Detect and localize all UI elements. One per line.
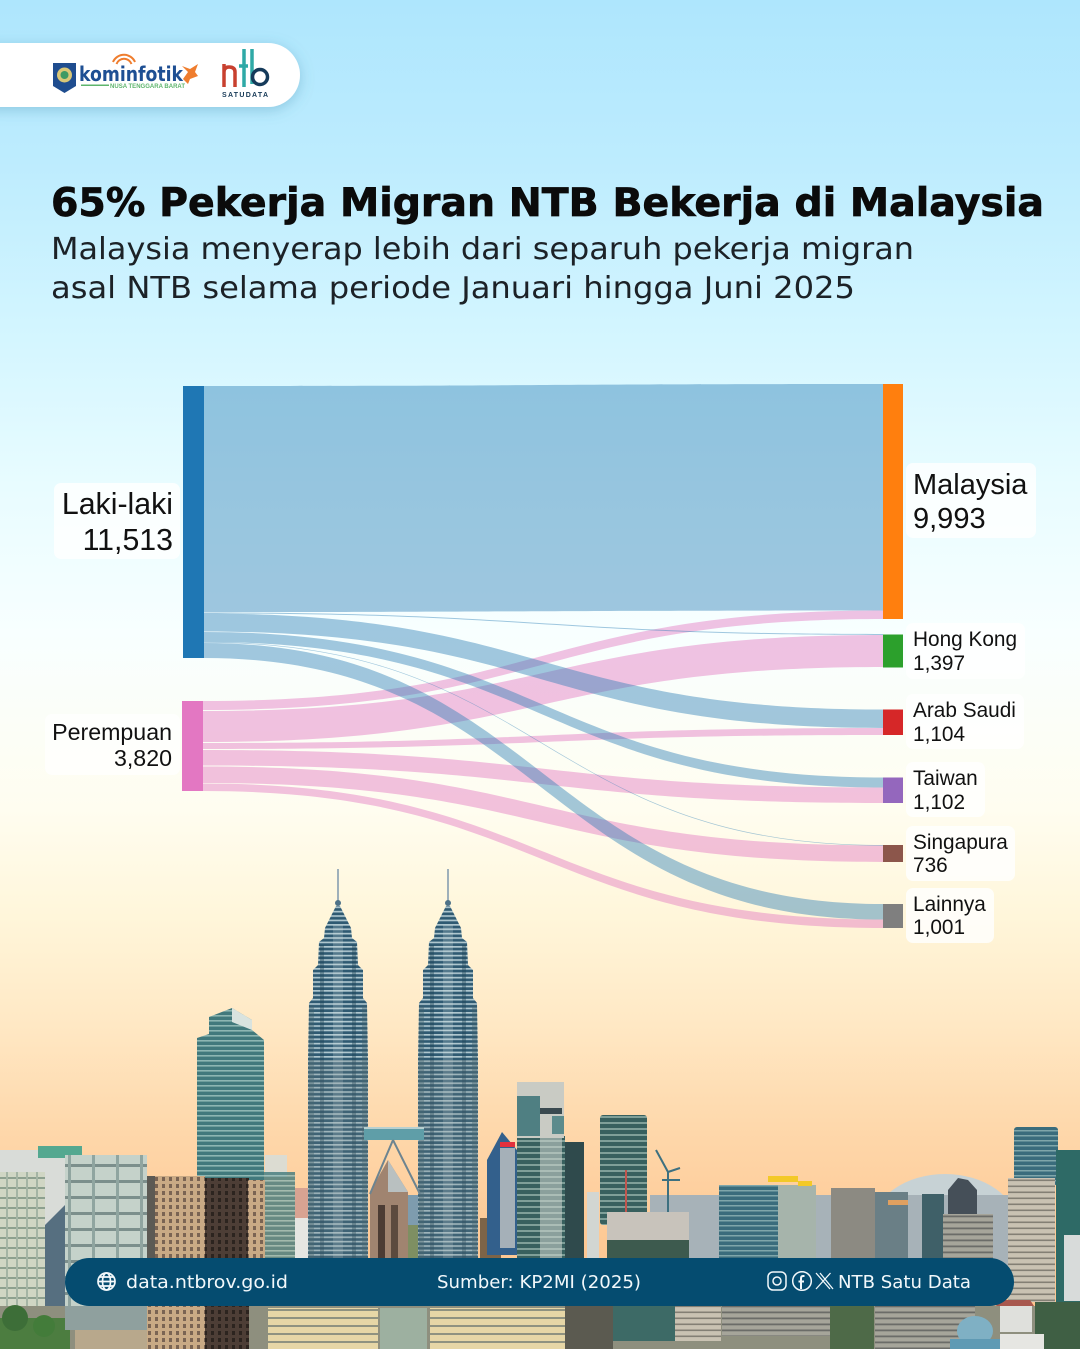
dark hotel tower: [205, 1178, 249, 1349]
links: Perempuan flows: [203, 610, 883, 928]
blue distant building: [406, 1195, 421, 1235]
dark blue tower with red top: [487, 1132, 517, 1255]
label: Perempuan: [45, 714, 180, 775]
label: Laki-laki: 11,513: [83, 524, 173, 557]
tower crown highlight: [232, 1008, 252, 1030]
teal roof: [38, 1146, 82, 1158]
Nusa Tenggara Barat tagline: NUSA TENGGARA BARAT: [110, 84, 185, 90]
orange rooftop: [888, 1200, 908, 1205]
construction building: [607, 1170, 689, 1264]
teal office tower: [197, 1008, 264, 1200]
distant buildings haze: [650, 1195, 1050, 1270]
label: Taiwan: 1,102: [913, 791, 965, 814]
icon: wifi arcs: [113, 55, 135, 64]
skybridge: [364, 1127, 424, 1194]
label: Malaysia: [906, 463, 1036, 538]
label: Arab Saudi: 1,104: [913, 723, 965, 746]
dark glass side: [45, 1205, 65, 1325]
links: Laki-laki flows: [204, 384, 883, 920]
label: Laki-laki: Laki-laki: [62, 488, 173, 521]
social handle: NTB Satu Data: [838, 1272, 971, 1293]
grey blue block: [875, 1192, 908, 1262]
green rule: [81, 84, 109, 86]
label: Singapura: 736: [913, 854, 948, 877]
label: Lainnya: 1,001: [913, 916, 965, 939]
kominfotik wordmark: kominfotik: [79, 62, 184, 86]
ntb logo: [224, 49, 268, 87]
label: Perempuan: 3,820: [114, 745, 172, 771]
Petronas tower left: [308, 869, 368, 1262]
node: Laki-laki: [183, 386, 204, 658]
lower city: [0, 1300, 1080, 1349]
title: 65% Pekerja Migran NTB Bekerja di Malaysia: [51, 181, 1044, 226]
label: Hong Kong: Hong Kong: [913, 628, 1017, 651]
crane: [656, 1150, 680, 1212]
label: Lainnya: Lainnya: [913, 893, 986, 916]
yellow roofs: [768, 1176, 798, 1182]
footer bar: [65, 1258, 1014, 1306]
brown hotel tower: [147, 1176, 205, 1349]
icon: facebook: [793, 1272, 811, 1290]
subtitle: asal NTB selama periode Januari hingga Juni 2025: [51, 271, 855, 306]
website: data.ntbrov.go.id: [126, 1272, 288, 1293]
node: Arab Saudi: [883, 710, 903, 735]
label: Hong Kong: [906, 623, 1025, 679]
pink distant building: [295, 1188, 311, 1228]
label: Lainnya: [906, 888, 994, 943]
mid rise glass block: [719, 1185, 779, 1262]
label: Taiwan: [906, 762, 985, 817]
label: Arab Saudi: [906, 694, 1024, 749]
node: Hong Kong: [883, 634, 903, 668]
Petronas tower right: [418, 869, 478, 1262]
node: Lainnya: [883, 904, 903, 928]
icon: instagram: [768, 1272, 786, 1290]
node: Malaysia: [883, 384, 903, 619]
label: Malaysia: 9,993: [913, 503, 986, 535]
source: Sumber: KP2MI (2025): [437, 1272, 641, 1293]
subtitle: Malaysia menyerap lebih dari separuh pekerja migran: [51, 232, 914, 267]
slim white tower: [587, 1192, 599, 1262]
green distant trees: [408, 1225, 421, 1262]
cream tower left edge: [0, 1172, 45, 1318]
purple grey block: [943, 1214, 993, 1262]
white tower right: [1064, 1235, 1080, 1301]
label: Hong Kong: 1,397: [913, 652, 965, 675]
label: Malaysia: Malaysia: [913, 469, 1028, 501]
node: Taiwan: [883, 778, 903, 803]
white low block beside tower: [295, 1218, 310, 1268]
skyline illustration: [0, 869, 1080, 1349]
small pyramid tower: [370, 1160, 408, 1262]
dark green glass tower: [1056, 1150, 1080, 1302]
tan end of hotel: [248, 1180, 265, 1349]
dark edge of hotel: [147, 1176, 155, 1349]
dark tower group: [922, 1194, 944, 1262]
label: Perempuan: Perempuan: [52, 719, 172, 745]
label: Arab Saudi: Arab Saudi: [913, 699, 1016, 722]
far left white building: [0, 1150, 70, 1320]
icon: deer: [182, 64, 198, 84]
domed dark tower: [948, 1178, 977, 1215]
tan small block: [480, 1218, 501, 1262]
white glass condominium: [65, 1155, 147, 1330]
icon: NTB shield: [53, 63, 76, 93]
grey tan towers: [831, 1188, 875, 1262]
light block: [778, 1185, 816, 1262]
blue glass tower: [1014, 1127, 1058, 1185]
node: Singapura: [883, 845, 903, 862]
icon: X: [816, 1273, 833, 1289]
sankey chart: [45, 384, 1036, 943]
round green glass tower: [600, 1115, 647, 1225]
node: Perempuan: [182, 701, 203, 791]
label: Taiwan: Taiwan: [913, 767, 978, 790]
label: Singapura: Singapura: [913, 831, 1008, 854]
label: Singapura: [906, 826, 1015, 881]
logo pill: [0, 43, 300, 107]
satudata caption: SATUDATA: [222, 92, 268, 99]
icon: globe: [98, 1273, 115, 1290]
white top of mid building: [265, 1155, 287, 1177]
label: Laki-laki: [54, 483, 180, 559]
subtitle: [51, 232, 914, 306]
stepped right tower: [517, 1082, 584, 1262]
teal striped building: [248, 1172, 295, 1267]
distant mountain: [873, 1174, 1017, 1276]
cream high rise: [1008, 1178, 1055, 1302]
